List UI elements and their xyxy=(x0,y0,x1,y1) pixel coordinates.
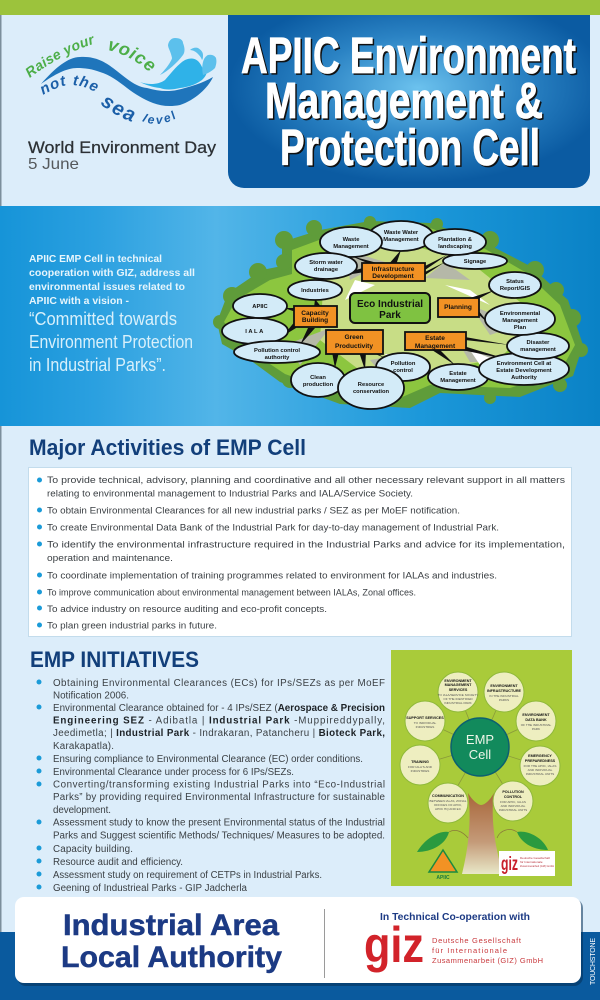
diagram labels: Capacity xyxy=(301,310,329,317)
service labels: INDUSTRIES xyxy=(411,769,429,773)
panel: major activities list: To improve communication about environmental management between IALAs, Zonal offices. xyxy=(47,588,416,598)
tree trunk xyxy=(462,793,503,874)
service labels: EMERGENCY xyxy=(528,754,552,758)
diagram labels: Clean xyxy=(310,375,326,381)
service circles xyxy=(400,672,560,823)
giz logo: Zusammenarbeit (GIZ) GmbH xyxy=(432,956,543,965)
authority name: Industrial Area xyxy=(63,909,279,942)
APIIC logo: APIIC xyxy=(436,875,450,881)
diagram labels: Signage xyxy=(464,259,487,265)
EMP cell hub xyxy=(451,718,509,776)
EMP initiatives list: Parks” by providing required Environmental Infrastructure for sustainable xyxy=(53,792,386,803)
vision statement: Environment Protection xyxy=(29,332,193,352)
service labels: BETWEEN IALAS, ZONAL xyxy=(430,799,467,803)
diagram labels: drainage xyxy=(314,267,339,273)
EMP initiatives list: Jeedimetla; | Industrial Park - Indrakaran, Patancheru | Bioteck Park, xyxy=(53,728,385,739)
heading: EMP initiatives: EMP INITIATIVES xyxy=(30,647,199,672)
service labels: PARKS xyxy=(499,698,509,702)
logo: raise your voice not the sea level: Raise your xyxy=(26,36,94,78)
diagram labels: landscaping xyxy=(438,244,472,250)
EMP initiatives list: Converting/transforming existing Industrial Parks into “Eco-Industrial xyxy=(53,780,385,790)
panel: major activities list xyxy=(28,468,572,636)
service labels: ENVIRONMENT xyxy=(490,684,518,688)
service labels: IN THE INDUSTRIAL xyxy=(489,694,519,698)
EMP initiatives list: Capacity building. xyxy=(53,844,133,855)
service labels: DATA BANK xyxy=(525,718,547,722)
diagram labels: Estate xyxy=(449,371,467,377)
diagram labels: Eco Industrial xyxy=(357,299,423,310)
giz logo: für Internationale xyxy=(432,946,507,955)
service labels: PREPAREDNESS xyxy=(525,759,556,763)
vision statement xyxy=(29,254,195,375)
connector tails xyxy=(283,250,510,370)
EMP initiatives list: Notification 2006. xyxy=(53,690,129,702)
diagram labels: Park xyxy=(379,310,401,321)
diagram labels: Pollution xyxy=(391,361,416,367)
panel: major activities list: To provide technical, advisory, planning and coordinative and all other necessary relevant support in all matters xyxy=(47,475,565,486)
diagram labels: Resource xyxy=(358,382,385,388)
diagram labels: Plantation & xyxy=(438,237,472,243)
diagram labels: Estate xyxy=(425,335,445,342)
authority name: Local Authority xyxy=(61,941,282,974)
panel: major activities list: To identify the environmental infrastructure required in the Industrial Parks and advice for its implementation, xyxy=(47,540,565,550)
EMP initiatives list xyxy=(36,678,386,894)
EMP cell hub: Cell xyxy=(469,747,491,762)
technical cooperation: In Technical Co-operation with xyxy=(380,911,530,923)
service labels: SUPPORT SERVICES xyxy=(406,716,444,720)
logo: raise your voice not the sea level: not the xyxy=(40,76,98,95)
diagram labels: conservation xyxy=(353,389,389,395)
service labels: MANAGEMENT xyxy=(445,683,472,687)
giz small logo: Deutsche Gesellschaft xyxy=(520,856,550,860)
service labels: FOR APIIC, IALAS xyxy=(500,800,526,804)
EMP initiatives list: Environmental Clearance under process for 6 IPs/SEZs. xyxy=(53,767,294,778)
panel: EMP cell tree xyxy=(391,650,572,886)
diagram labels: Storm water xyxy=(309,260,343,266)
vision statement: in Industrial Parks”. xyxy=(29,355,166,375)
vision statement: APIIC EMP Cell in technical xyxy=(29,254,162,265)
diagram labels: Industries xyxy=(301,288,329,294)
service labels: AND INDIVIDUAL xyxy=(528,768,553,772)
panel: major activities list: To create Environmental Data Bank of the Industrial Park for day-to-day management of Industrial Park. xyxy=(47,522,499,534)
panel: major activities list: operation and maintenance. xyxy=(47,553,173,564)
service labels: OF THE INDUSTRIAL xyxy=(521,723,552,727)
giz small logo xyxy=(499,851,555,876)
diagram labels: Waste Water xyxy=(384,230,419,236)
service labels: OFFICES OF APIIC, xyxy=(434,803,462,807)
panel: major activities list: To coordinate implementation of training programmes related to environment for IALAs and industries. xyxy=(47,570,497,582)
logo: raise your voice not the sea level: level xyxy=(142,110,176,124)
service labels: TRAINING xyxy=(411,760,429,764)
service labels: TO IALA/SERVICE SOCIETY xyxy=(438,693,478,697)
panel: major activities list: To advice industry on resource auditing and eco-profit concepts. xyxy=(47,604,327,615)
diagram labels: Environmental xyxy=(500,311,541,317)
authority name xyxy=(61,909,282,974)
diagram labels: Pollution control xyxy=(254,348,300,354)
blue vision band xyxy=(0,206,600,426)
vision statement: “Committed towards xyxy=(29,309,177,329)
EMP initiatives list: Engineering SEZ - Adibatla | Industrial Park -Muppireddypally, xyxy=(53,716,385,726)
EMP initiatives list: Geening of Industrieal Parks - GIP Jadcherla xyxy=(53,883,248,894)
APIIC logo xyxy=(429,850,457,881)
service labels: FOR THE APIIC, IALAS xyxy=(524,764,556,768)
diagram labels: management xyxy=(520,347,556,353)
orange category boxes xyxy=(294,263,479,354)
diagram labels: Waste xyxy=(343,237,360,243)
diagram labels: Management xyxy=(415,343,456,350)
diagram labels: Green xyxy=(344,334,364,341)
tree branches xyxy=(420,692,540,803)
logo: raise your voice not the sea level xyxy=(26,36,216,124)
service labels: ENVIRONMENT xyxy=(522,713,550,717)
footer card xyxy=(15,897,583,986)
service labels: OF THE IDENTIFIED xyxy=(443,697,473,701)
diagram labels: IALA xyxy=(245,329,265,335)
diagram labels: APIIC xyxy=(252,304,269,310)
service labels: SERVICES xyxy=(449,688,468,692)
diagram labels: Disaster xyxy=(527,340,550,346)
service labels: PARK xyxy=(532,727,541,731)
diagram labels: control xyxy=(393,368,413,374)
giz logo xyxy=(364,917,543,973)
diagram labels: Status xyxy=(506,279,524,285)
diagram labels: Management xyxy=(333,244,369,250)
leaves xyxy=(417,832,548,852)
logo: raise your voice not the sea level: voice xyxy=(109,40,154,70)
service labels: POLLUTION xyxy=(502,790,524,794)
vision statement: cooperation with GIZ, address all xyxy=(29,268,195,279)
giz small logo: für Internationale xyxy=(520,860,543,864)
title panel xyxy=(228,15,590,188)
EMP initiatives list: Obtaining Environmental Clearances (ECs) for IPs/SEZs as per MoEF xyxy=(53,678,385,689)
giz logo: Deutsche Gesellschaft xyxy=(432,936,522,945)
diagram labels: Building xyxy=(302,317,328,324)
EMP initiatives list: Ensuring compliance to Environmental Clearance (EC) order conditions. xyxy=(53,754,363,765)
diagram labels: Plan xyxy=(514,325,527,331)
service labels: APIIC HQ AND EC xyxy=(435,807,462,811)
service labels: ENVIRONMENT xyxy=(444,679,472,683)
service labels: AND INDIVIDUAL xyxy=(501,804,526,808)
diagram labels: Planning xyxy=(444,304,472,311)
diagram labels: Report/GIS xyxy=(500,286,530,292)
speech bubbles xyxy=(222,221,569,409)
vision statement: APIIC with a vision - xyxy=(29,296,129,307)
central box xyxy=(350,293,430,323)
diagram labels: Management xyxy=(440,378,476,384)
diagram labels: Productivity xyxy=(335,343,373,350)
EMP initiatives list: Assessment study to know the present Environmental status of the Industrial xyxy=(53,818,385,828)
diagram labels: Environment Cell at xyxy=(497,361,551,367)
service labels xyxy=(406,679,556,812)
service labels: INDUSTRIAL PARK xyxy=(444,701,473,705)
diagram labels: Management xyxy=(383,237,419,243)
service labels: CONTROL xyxy=(504,795,523,799)
panel: major activities list: To plan green industrial parks in future. xyxy=(47,620,217,632)
EMP initiatives list: Karakapatla). xyxy=(53,741,114,752)
diagram labels: Management xyxy=(502,318,538,324)
tree canopy xyxy=(213,216,588,408)
EMP initiatives list: Environmental Clearance obtained for - 4 IPs/SEZ (Aerospace & Precision xyxy=(53,703,385,714)
service labels: INDUSTRIES xyxy=(416,725,434,729)
diagram labels: Development xyxy=(372,273,415,280)
EMP initiatives list: Assessment study on requirement of CETPs in Industrial Parks. xyxy=(53,870,322,881)
date line: World Environment Day: 5 June xyxy=(28,156,79,173)
EMP cell hub: EMP xyxy=(466,732,494,747)
service labels: INDUSTRIAL UNITS xyxy=(499,808,527,812)
date line: World Environment Day: World Environment Day xyxy=(28,139,217,157)
vision statement: environmental issues related to xyxy=(29,282,185,293)
heading: major activities: Major Activities of EMP Cell xyxy=(29,435,306,460)
bottom blue band xyxy=(0,932,600,1000)
top green bar xyxy=(0,0,600,15)
diagram labels: Authority xyxy=(511,375,538,381)
diagram labels: Estate Development xyxy=(496,368,552,374)
service labels: INFRASTRUCTURE xyxy=(487,689,522,693)
service labels: COMMUNICATION xyxy=(432,794,464,798)
EMP initiatives list: Resource audit and efficiency. xyxy=(53,857,183,868)
giz small logo: giz xyxy=(501,854,518,875)
logo: raise your voice not the sea level: sea xyxy=(101,98,134,122)
EMP initiatives list: Parks and Suggest scientific Methods/ Techniques/ Measures to be adopted. xyxy=(53,830,385,842)
diagram labels: Infrastructure xyxy=(372,266,415,273)
EMP initiatives list: development. xyxy=(53,805,111,816)
eco industrial park diagram xyxy=(213,216,588,409)
service labels: INDUSTRIAL UNITS xyxy=(526,772,554,776)
giz logo: giz xyxy=(364,917,424,973)
service labels: TO INDIVIDUAL xyxy=(414,721,437,725)
diagram labels xyxy=(245,230,556,395)
diagram labels: authority xyxy=(265,355,290,361)
panel: major activities list: To obtain Environmental Clearances for all new industrial parks / SEZ as per MoEF notification. xyxy=(47,506,460,516)
giz small logo: Zusammenarbeit (GIZ) GmbH xyxy=(520,864,554,868)
date line: World Environment Day xyxy=(28,139,217,173)
service labels: FOR IALA'S AND xyxy=(408,765,433,769)
diagram labels: production xyxy=(303,382,334,388)
credit: TOUCHSTONE xyxy=(590,938,597,985)
panel: major activities list: relating to environmental management to Industrial Parks and IALA/Service Society. xyxy=(47,488,413,500)
